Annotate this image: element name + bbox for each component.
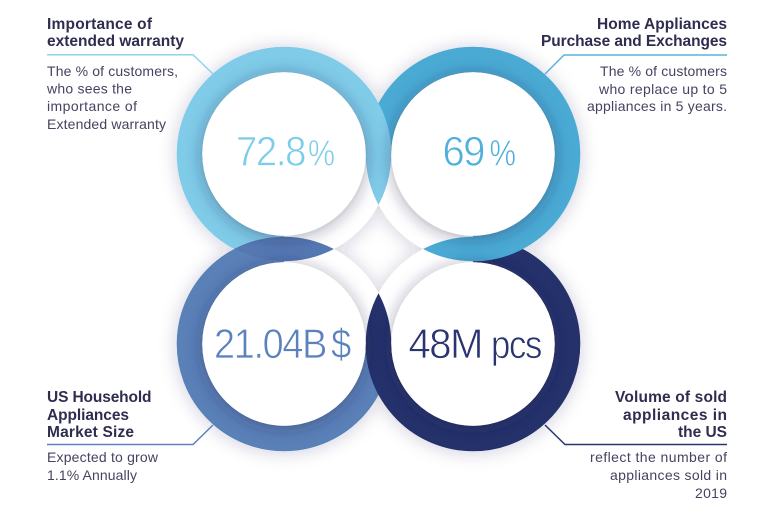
heading: Purchase and Exchanges (541, 33, 727, 50)
leader line (545, 425, 727, 444)
description (587, 63, 727, 114)
description (46, 63, 178, 132)
description: The % of customers, (47, 63, 178, 79)
heading: US Household (47, 389, 152, 406)
leader line (47, 425, 213, 444)
description: Extended warranty (47, 116, 166, 132)
heading: Appliances (47, 407, 129, 424)
leader line (545, 55, 727, 74)
description (590, 449, 727, 501)
heading: extended warranty (47, 33, 184, 50)
heading (615, 389, 727, 441)
value: 69%: 69 (442, 128, 484, 174)
heading: appliances in (623, 407, 727, 424)
overlap lens: extended warranty (366, 103, 391, 205)
leader line (47, 55, 213, 74)
description: reflect the number of (590, 449, 727, 465)
value: 21.04B$: 21.04B (214, 320, 326, 367)
overlap lens: purchase and exchanges (423, 237, 523, 261)
value: 48M pcs: 48M (408, 320, 482, 367)
callout: market size (47, 389, 213, 483)
value: 72.8%: % (308, 132, 335, 174)
heading: Volume of sold (615, 389, 727, 406)
ring: volume sold (378, 250, 568, 438)
description (47, 449, 159, 483)
ring: purchase and exchanges (378, 60, 568, 248)
description: importance of (47, 98, 137, 114)
description: The % of customers (600, 63, 727, 79)
heading: Home Appliances (597, 16, 727, 33)
inner white circles (202, 72, 555, 426)
heading: Importance of (47, 16, 153, 33)
white base discs (177, 47, 580, 451)
description: 1.1% Annually (47, 467, 137, 483)
description: appliances sold in (610, 467, 727, 483)
description: who replace up to 5 (598, 81, 727, 97)
value: 21.04B$: $ (331, 320, 351, 367)
value: 69%: % (490, 132, 516, 174)
description: 2019 (695, 485, 727, 501)
description: appliances in 5 years. (587, 98, 727, 114)
callout: volume sold (545, 389, 727, 501)
callout: purchase and exchanges (541, 16, 727, 114)
heading: the US (678, 424, 727, 441)
ring: extended warranty (190, 60, 378, 248)
heading (47, 389, 152, 441)
value: 48M pcs: pcs (491, 324, 542, 367)
value: 69% (442, 128, 516, 174)
value: 72.8%: 72.8 (236, 128, 305, 174)
heading (47, 16, 184, 50)
heading: Market Size (47, 424, 134, 441)
description: Expected to grow (47, 449, 159, 465)
heading (541, 16, 727, 50)
ring: market size (190, 250, 378, 438)
overlap lens: volume sold (366, 293, 391, 395)
callout: extended warranty (46, 16, 213, 132)
description: who sees the (46, 80, 132, 96)
value: 48M pcs (408, 320, 542, 367)
overlap lens: market size (234, 237, 334, 261)
